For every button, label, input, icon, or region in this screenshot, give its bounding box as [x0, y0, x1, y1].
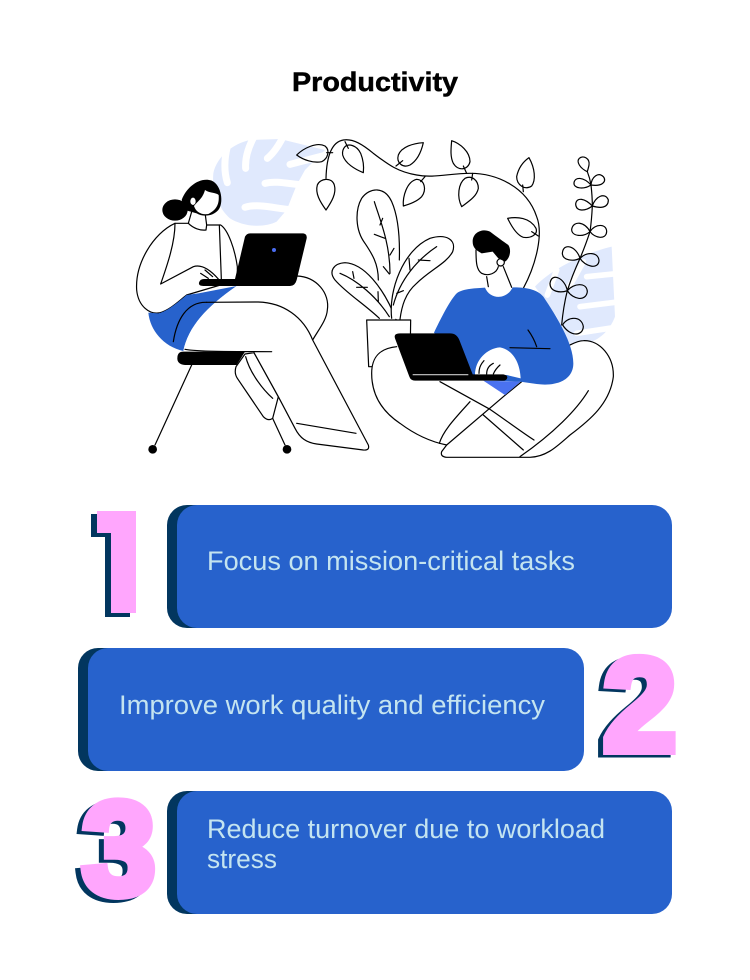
neck and head — [476, 250, 512, 288]
hand — [475, 347, 521, 378]
number 1: 1 — [70, 477, 153, 645]
card 1: Focus on mission-critical tasks — [207, 546, 575, 576]
potted plant — [332, 190, 454, 367]
card 3 — [167, 791, 672, 914]
laptop — [395, 333, 507, 381]
illustration: people working on laptops — [137, 135, 620, 457]
background leaf: right — [535, 247, 620, 345]
vine with hanging leaves — [297, 140, 539, 288]
card 2: Improve work quality and efficiency — [119, 690, 546, 720]
card 1 — [167, 505, 672, 628]
number 1 — [91, 511, 136, 617]
item 2 — [78, 632, 676, 781]
laptop — [199, 233, 307, 286]
crossed legs — [372, 341, 613, 457]
chair legs — [155, 365, 285, 445]
background leaf: left — [213, 135, 330, 226]
number 2: 2 — [603, 632, 676, 778]
item 1 — [70, 474, 672, 645]
torso — [137, 223, 237, 313]
seat — [177, 352, 245, 365]
card 2 — [78, 648, 584, 771]
number 3: 3 — [82, 775, 155, 922]
fern sprig — [550, 157, 608, 334]
card 3: stress — [207, 844, 277, 874]
hair and face — [162, 199, 188, 221]
number 1: 1 — [76, 474, 159, 642]
sweater — [434, 287, 573, 385]
shorts — [148, 286, 237, 351]
card 3: Reduce turnover due to workload — [207, 814, 605, 844]
number 2: 2 — [598, 634, 671, 781]
man sitting cross-legged — [372, 230, 613, 457]
back leg — [235, 353, 278, 420]
number 3: 3 — [77, 778, 150, 925]
woman on chair — [137, 180, 369, 454]
title: Productivity — [292, 67, 458, 97]
item 3 — [77, 775, 672, 925]
front leg — [183, 286, 369, 450]
far knee — [280, 276, 328, 340]
